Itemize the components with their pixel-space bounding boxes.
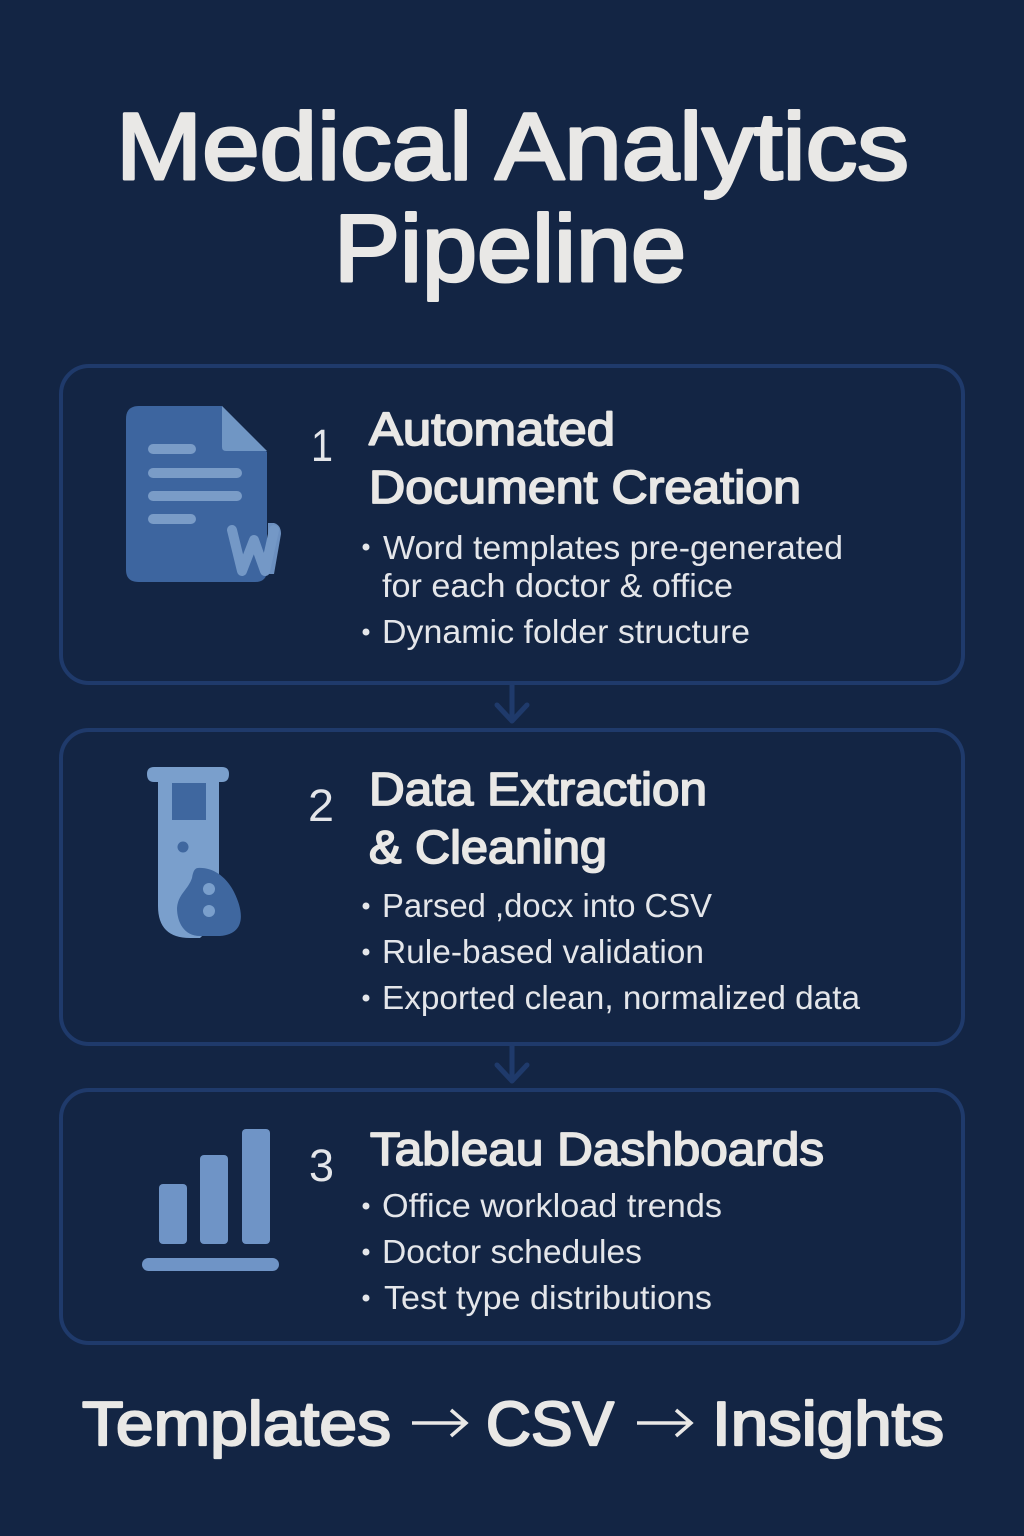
- bullet list: step 3: [362, 1187, 722, 1316]
- panel: tableau dashboards: [61, 1090, 963, 1343]
- arrow: step 1 to step 2: [497, 685, 527, 721]
- heading: data extraction and cleaning: & Cleaning: [369, 821, 607, 873]
- title: Pipeline: [334, 196, 686, 302]
- icon: Word document: [126, 406, 281, 582]
- bullet list: step 1: for each doctor & office: [382, 567, 733, 604]
- footer: pipeline summary: Insights: [712, 1390, 944, 1459]
- heading: automated document creation: Automated: [369, 403, 615, 455]
- bullet list: step 2: Rule-based validation: [382, 933, 704, 970]
- heading: data extraction and cleaning: Data Extraction: [369, 763, 707, 815]
- heading: automated document creation: [369, 403, 801, 513]
- panel: automated document creation: [61, 366, 963, 683]
- bullet list: step 1: Word templates pre-generated: [383, 529, 843, 566]
- title: [116, 94, 909, 302]
- heading: automated document creation: Document Creation: [369, 461, 801, 513]
- title: Medical Analytics: [116, 94, 909, 200]
- bullet list: step 3: Office workload trends: [382, 1187, 722, 1224]
- bullet list: step 1: [362, 529, 843, 650]
- bullet list: step 2: [362, 887, 861, 1016]
- icon: bar chart: [142, 1129, 279, 1271]
- icon: test tube: [147, 767, 241, 938]
- footer: pipeline summary: [82, 1390, 944, 1459]
- step number 1: 1: [311, 420, 333, 471]
- step number 3: 3: [309, 1140, 334, 1191]
- bullet list: step 2: Exported clean, normalized data: [382, 979, 861, 1016]
- arrow: step 2 to step 3: [497, 1046, 527, 1081]
- heading: data extraction and cleaning: [369, 763, 707, 873]
- bullet list: step 3: Doctor schedules: [382, 1233, 642, 1270]
- bullet list: step 1: Dynamic folder structure: [382, 613, 750, 650]
- bullet list: step 3: Test type distributions: [384, 1279, 712, 1316]
- footer: pipeline summary: Templates: [82, 1390, 391, 1459]
- heading: tableau dashboards: Tableau Dashboards: [370, 1123, 824, 1175]
- bullet list: step 2: Parsed ,docx into CSV: [382, 887, 712, 924]
- footer: pipeline summary: CSV: [486, 1390, 615, 1459]
- panel: data extraction and cleaning: [61, 730, 963, 1044]
- step number 2: 2: [308, 780, 334, 831]
